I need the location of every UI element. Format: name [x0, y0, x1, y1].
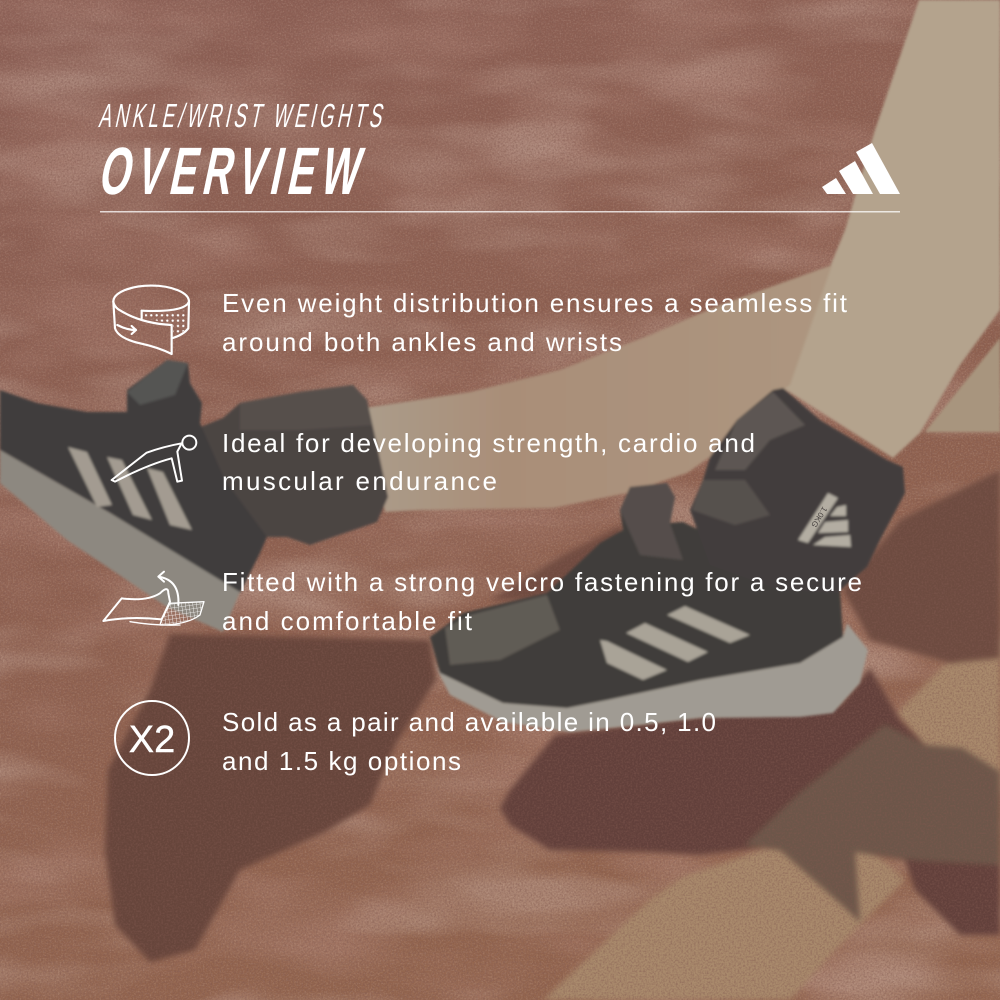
text	[222, 707, 716, 776]
icon: wrap-around band	[113, 286, 189, 354]
icon: plank figure	[112, 436, 196, 482]
text: Even weight distribution ensures a seamless fit	[222, 288, 848, 318]
horizontal leg	[365, 265, 832, 512]
title: OVERVIEW: OVERVIEW	[94, 133, 369, 208]
far leg	[925, 338, 1000, 432]
text: around both ankles and wrists	[222, 327, 622, 357]
icon: brand logo three bars	[822, 143, 900, 194]
text: Fitted with a strong velcro fastening for a secure	[222, 567, 862, 597]
feature 2: strength and cardio	[112, 428, 755, 496]
subtitle: ANKLE/WRIST WEIGHTS: ANKLE/WRIST WEIGHTS	[96, 97, 387, 134]
text: and comfortable fit	[222, 606, 473, 636]
feature 1: even weight distribution	[113, 286, 848, 357]
left ankle weight	[193, 385, 388, 545]
icon: velcro fabric	[103, 572, 204, 625]
shin	[783, 0, 1000, 458]
left shoe	[0, 360, 267, 593]
icon: X2 badge	[115, 701, 189, 775]
background photo: running track with legs and shoes: 1.0KG	[809, 505, 829, 529]
right ankle weight	[690, 388, 905, 593]
ground shadows	[105, 470, 1000, 962]
text	[222, 288, 848, 357]
text	[222, 428, 755, 496]
text: and 1.5 kg options	[222, 746, 461, 776]
header divider	[100, 211, 900, 212]
sand-coloured track patches	[543, 640, 1000, 1000]
feature 3: velcro fastening	[103, 567, 862, 636]
text: Ideal for developing strength, cardio and	[222, 428, 755, 458]
right shoe	[430, 483, 843, 708]
feature 4: sold as a pair	[115, 701, 716, 776]
text: Sold as a pair and available in 0.5, 1.0	[222, 707, 716, 737]
text: muscular endurance	[222, 466, 497, 496]
icon: X2 badge: X2	[129, 719, 175, 761]
text	[222, 567, 862, 636]
